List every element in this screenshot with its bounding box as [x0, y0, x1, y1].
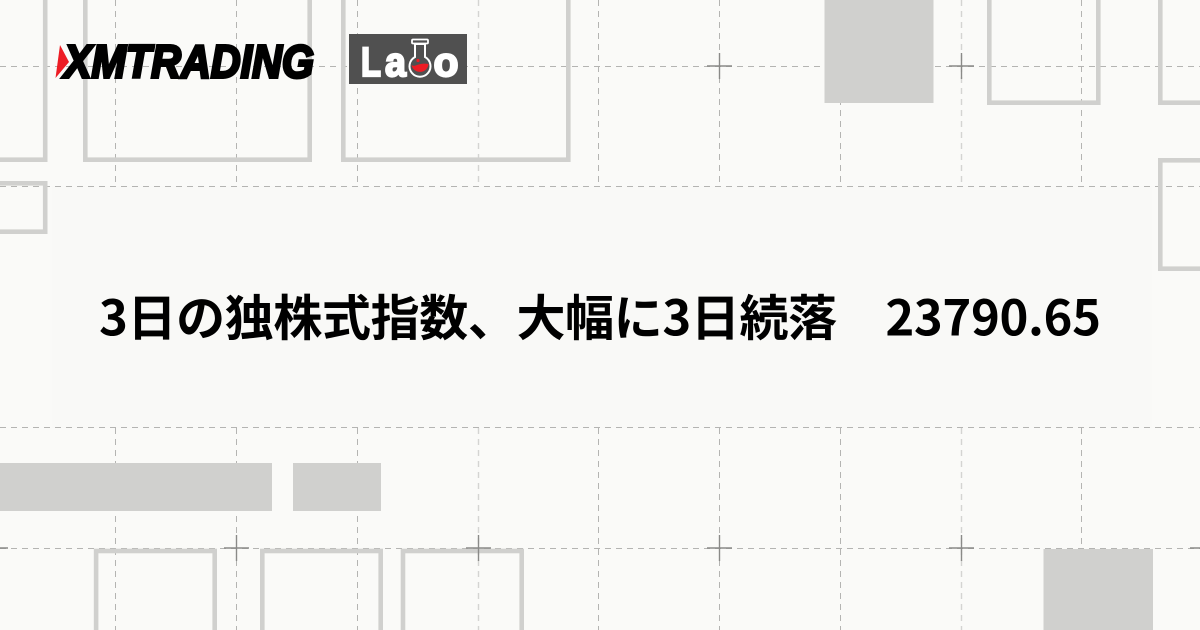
- logo: Lab: [349, 34, 467, 85]
- icon: flask: [409, 40, 430, 77]
- solid bars: lower left: [0, 463, 381, 511]
- outlined squares: top: [0, 0, 1200, 269]
- solid block: top right: [824, 0, 934, 103]
- title: 3日の独株式指数、大幅に3日続落 23790.65: [99, 280, 1101, 350]
- icon: red triangle: [56, 45, 69, 78]
- outlined squares: bottom: [96, 551, 522, 630]
- logo: XMTRADING: XMTRADING: [61, 36, 314, 88]
- solid block: bottom right: [1044, 549, 1153, 630]
- logo: Lab: o: [434, 39, 458, 85]
- logo: Lab: L: [361, 39, 381, 85]
- logo: Lab: a: [385, 39, 407, 85]
